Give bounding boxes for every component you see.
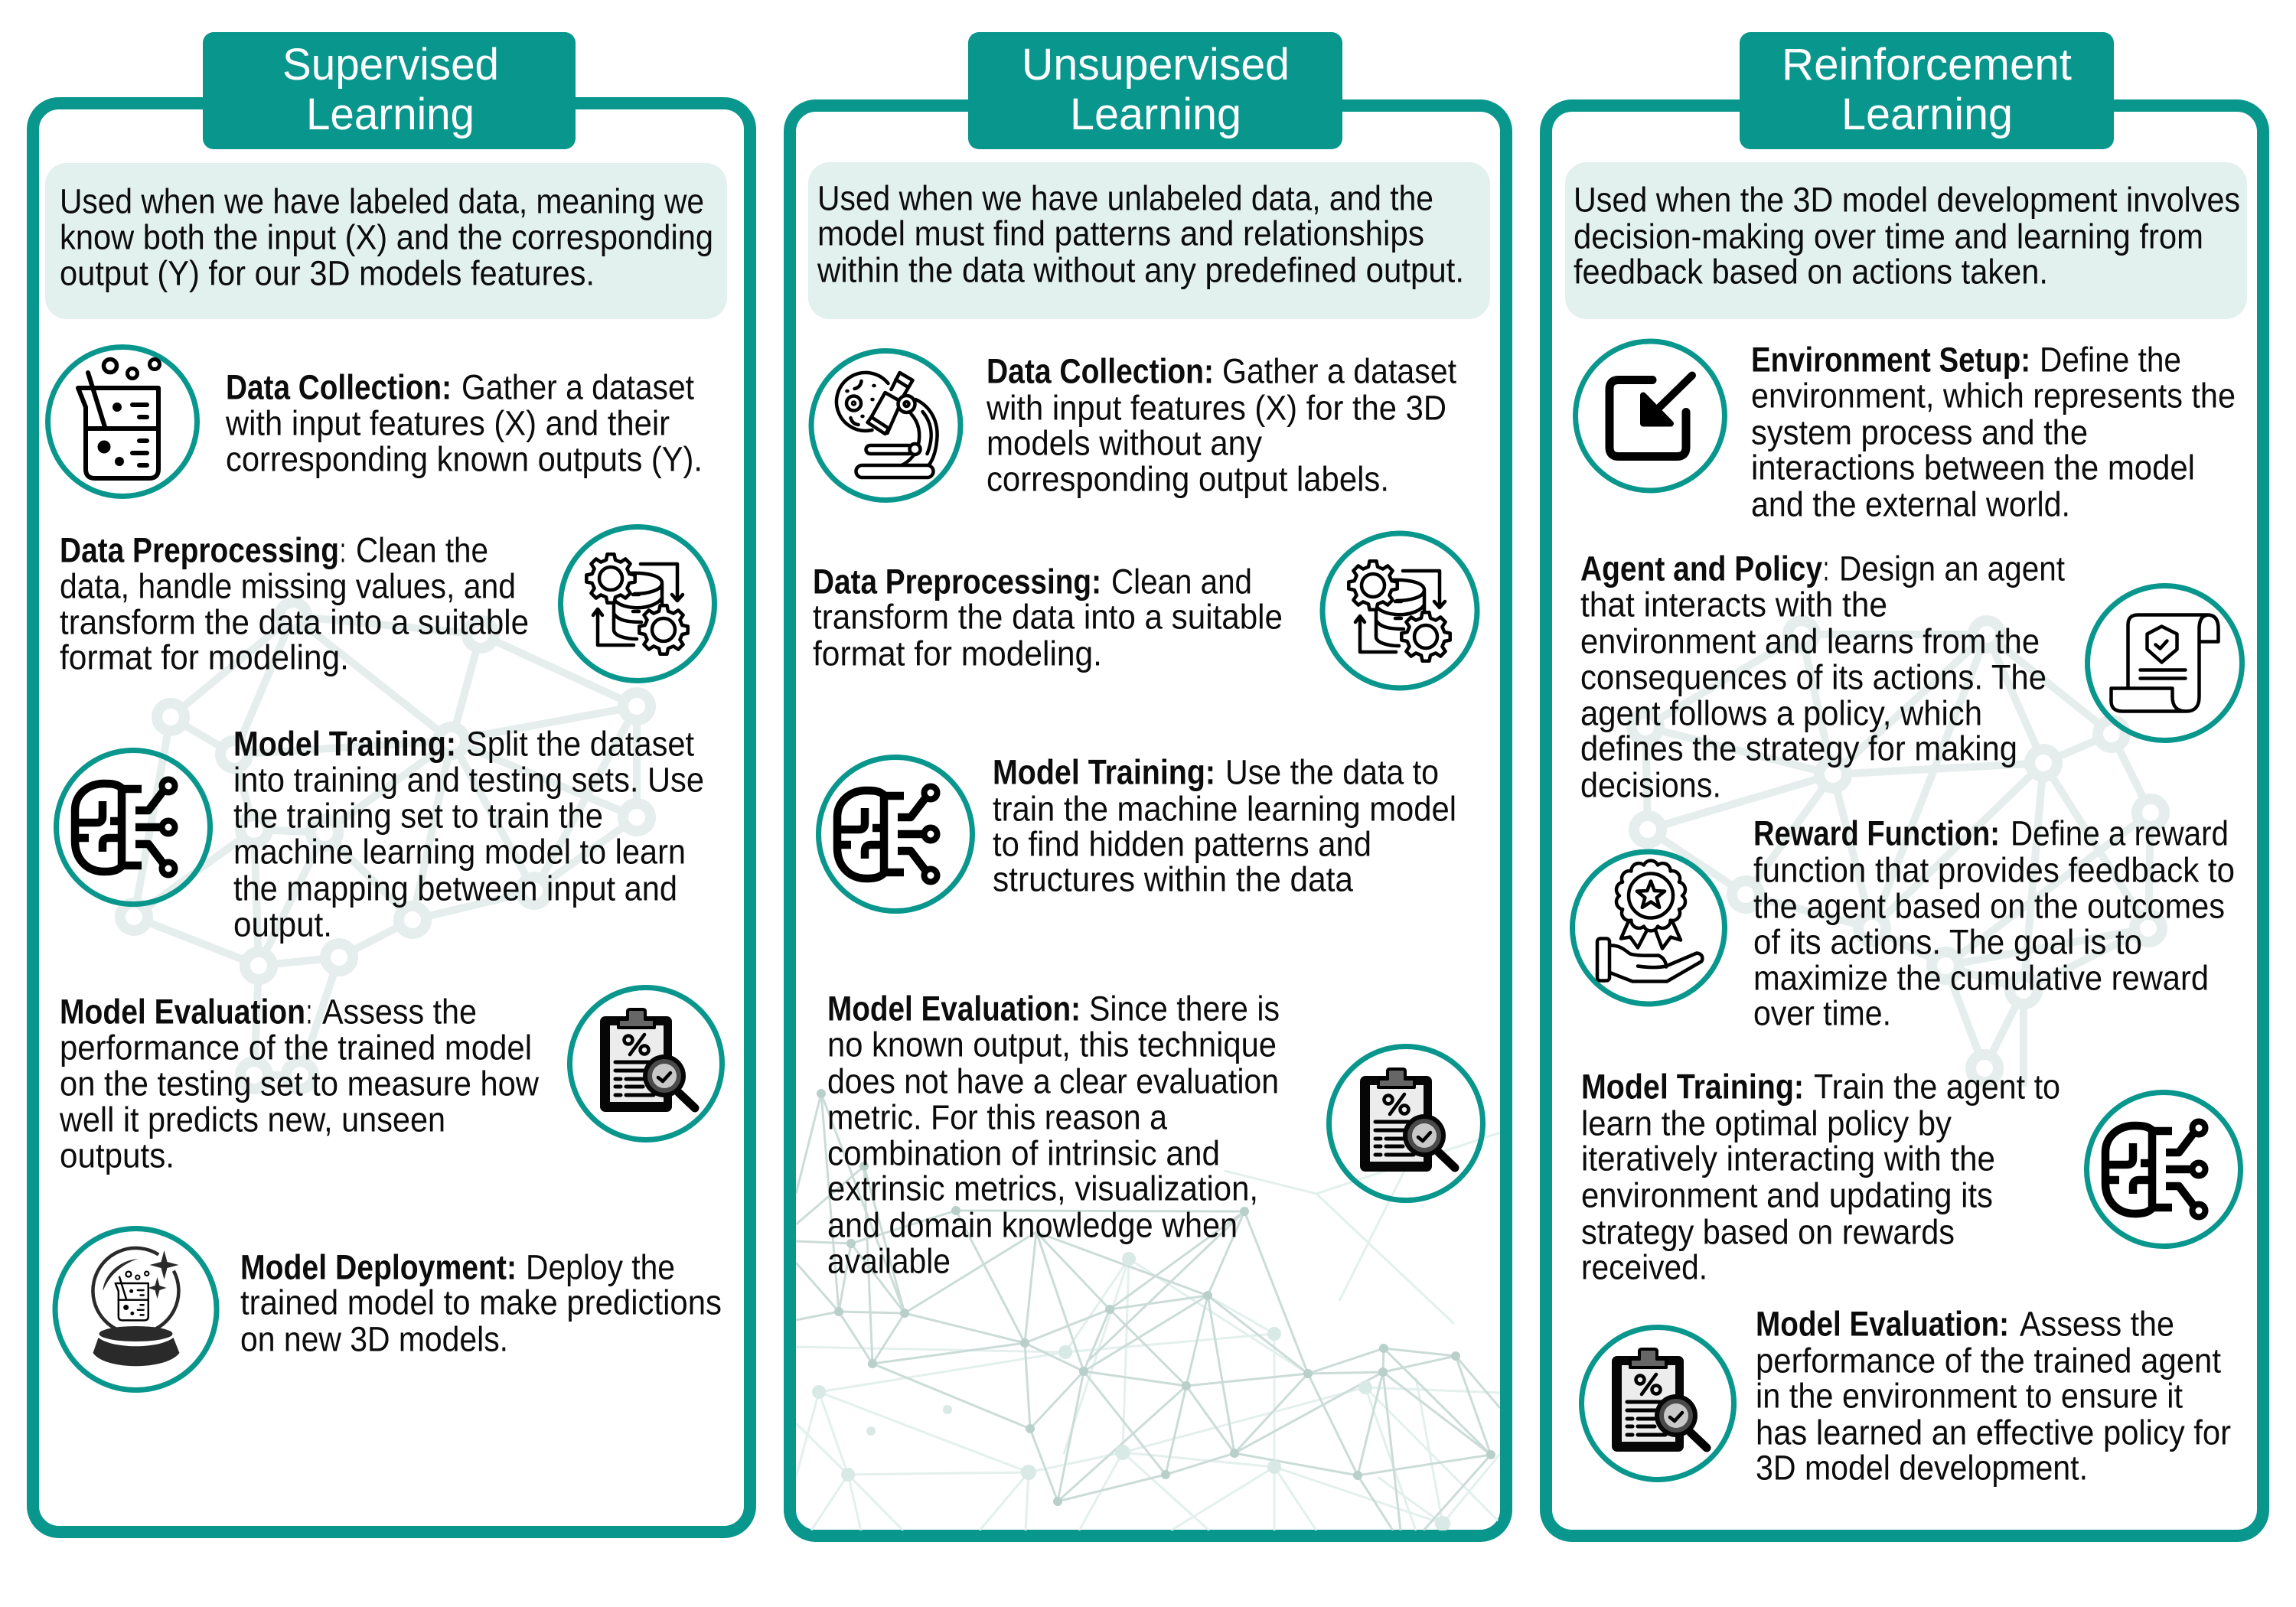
text: model evaluation [1756,1304,2231,1488]
text: model training: Train the agent to [1814,1067,2060,1107]
text: data preprocessing: format for modeling. [813,634,1102,673]
text: model evaluation: no known output, this technique [827,1025,1277,1064]
intro box: model must find patterns and relationships [817,214,1424,253]
text: data collection: Data Collection: [226,367,452,407]
text: model evaluation: outputs. [60,1136,174,1175]
text: model evaluation: on the testing set to measure how [60,1064,539,1103]
text: data collection: models without any [987,424,1262,462]
intro box [808,162,1490,319]
text: model deployment [240,1247,722,1359]
heading: Reinforcement Learning: Learning [1841,90,2013,139]
text: environment setup: system process and the [1751,413,2088,451]
heading: Unsupervised Learning: Learning [1070,90,1241,139]
text: model training: Model Training: [233,724,456,764]
text: model training: iteratively interacting with the [1581,1139,1995,1178]
text: model training: environment and updating its [1581,1175,1993,1215]
icon: microscope [811,350,960,500]
text: data preprocessing: : [340,531,346,569]
text: data collection [225,367,703,479]
text: model evaluation: Model Evaluation: [827,989,1081,1028]
icon: brain [2086,1093,2241,1246]
intro box [1565,162,2247,319]
text: model deployment: trained model to make predictions [240,1283,722,1322]
text: data collection: Gather a dataset [1222,352,1456,390]
heading: Unsupervised Learning: Unsupervised [1022,40,1290,90]
text: agent and policy [1580,549,2065,805]
background network [796,1089,1500,1531]
text: data preprocessing [60,531,529,676]
text: model evaluation: performance of the trained model [60,1028,532,1067]
text: agent and policy: Design an agent [1839,549,2065,588]
text: agent and policy: : [1823,549,1829,588]
text: model evaluation: performance of the trained agent [1756,1341,2221,1380]
panel: supervised learning [33,32,750,1532]
text: data preprocessing [813,562,1283,673]
text: model evaluation: Model Evaluation [60,992,305,1032]
intro box: Used when we have unlabeled data, and the [817,179,1433,217]
text: model evaluation: in the environment to ensure it [1756,1376,2183,1416]
text: model training: machine learning model to learn [233,833,686,871]
intro box: Used when we have labeled data, meaning we [60,182,704,220]
text: model evaluation [59,992,539,1175]
icon: reward hand and badge [1572,852,1725,1004]
icon: gears and database [560,526,715,681]
text: data collection: with input features (X) and their [225,404,670,442]
text: model deployment: Deploy the [526,1247,675,1287]
icon: brain [57,750,210,905]
text: reward function: of its actions. The goal is to [1753,923,2142,961]
text: model deployment: Model Deployment: [240,1247,517,1287]
text: model training: to find hidden patterns and [993,825,1371,863]
text: model training: Model Training: [1581,1067,1804,1107]
text: agent and policy: agent follows a policy, which [1580,693,1982,733]
text: environment setup: environment, which represents the [1751,376,2236,415]
panel: reinforcement learning [1546,32,2263,1536]
text: model training: strategy based on rewards [1581,1212,1955,1252]
text: environment setup: interactions between the model [1751,448,2195,487]
text: environment setup: and the external world. [1751,485,2070,523]
text: model training: the mapping between input and [233,869,677,908]
text: model evaluation: Model Evaluation: [1756,1304,2009,1344]
intro box: know both the input (X) and the corresponding [60,217,713,257]
text: model training [993,753,1456,898]
text: agent and policy: decisions. [1580,765,1721,805]
text: agent and policy: environment and learns from the [1580,621,2040,661]
text: data collection: with input features (X) for the 3D [986,389,1446,427]
text: reward function: Define a reward [2011,814,2229,852]
text: model training: Split the dataset [466,724,694,764]
background network [1632,621,2164,1087]
text: model evaluation: does not have a clear evaluation [827,1062,1279,1100]
text: model training: Model Training: [993,753,1215,791]
text: agent and policy: that interacts with the [1580,585,1887,624]
text: model evaluation: 3D model development. [1756,1448,2088,1488]
text: model evaluation: Since there is [1089,989,1280,1028]
heading: Unsupervised Learning [968,32,1342,149]
text: environment setup [1751,340,2236,523]
text: model evaluation: available [827,1241,951,1281]
text: model training: Use the data to [1225,753,1439,791]
intro box: decision-making over time and learning from [1574,217,2203,256]
text: data preprocessing: Data Preprocessing [60,531,339,569]
text: data preprocessing: Clean and [1111,562,1252,601]
icon: clipboard with magnifier [1329,1047,1483,1200]
text: data collection: Gather a dataset [461,367,694,407]
text: model training: received. [1581,1247,1707,1287]
heading: Supervised Learning: Supervised [282,40,499,90]
intro box: feedback based on actions taken. [1574,253,2048,291]
text: agent and policy: Agent and Policy [1580,549,1822,588]
text: model training [1581,1067,2060,1287]
text: model evaluation: metric. For this reason a [827,1097,1168,1137]
text: model training: the training set to train the [233,796,603,836]
text: data preprocessing: data, handle missing values, and [60,566,516,606]
icon: clipboard with magnifier [1581,1327,1734,1480]
text: reward function: function that provides feedback to [1753,851,2235,889]
text: model deployment: on new 3D models. [240,1319,508,1359]
text: reward function: Reward Function: [1753,814,2000,852]
heading: Supervised Learning [203,32,576,149]
text: reward function: maximize the cumulative reward [1753,958,2209,998]
text: model evaluation: Assess the [2020,1304,2174,1344]
icon: policy scroll [2088,586,2242,741]
text: environment setup: Environment Setup: [1751,340,2030,380]
text: data collection: Data Collection: [987,352,1214,390]
icon: clipboard with magnifier [569,987,722,1140]
text: data preprocessing: format for modeling. [60,638,349,676]
panel: unsupervised learning [790,32,1506,1536]
text: model evaluation: and domain knowledge when [827,1206,1238,1244]
intro box: output (Y) for our 3D models features. [60,254,595,292]
heading: Supervised Learning: Learning [306,90,475,139]
icon: crystal ball [55,1229,217,1390]
text: model training: into training and testing sets. Use [233,761,704,799]
text: reward function [1753,814,2235,1033]
background network [120,602,651,1089]
text: data preprocessing: transform the data into a suitable [60,603,529,641]
text: model evaluation: combination of intrinsic and [827,1134,1220,1172]
intro box: Used when the 3D model development involves [1574,181,2240,219]
text: model evaluation: : [306,992,312,1032]
icon: beaker [47,347,197,496]
text: model evaluation: well it predicts new, unseen [59,1100,445,1139]
text: environment setup: Define the [2040,340,2181,380]
text: data collection [986,352,1456,499]
text: reward function: over time. [1753,993,1891,1033]
icon: environment arrow [1575,341,1725,491]
text: model training: structures within the data [993,860,1354,898]
intro box [45,163,727,319]
text: data preprocessing: transform the data into a suitable [813,597,1283,637]
text: model evaluation: has learned an effective policy for [1756,1413,2231,1452]
intro box: within the data without any predefined output. [817,251,1464,289]
text: agent and policy: defines the strategy for making [1580,729,2017,768]
text: model training: learn the optimal policy by [1581,1103,1952,1143]
heading: Reinforcement Learning: Reinforcement [1782,40,2072,90]
text: data collection: corresponding known outputs (Y). [226,439,703,479]
heading: Reinforcement Learning [1740,32,2114,149]
text: model evaluation [827,989,1280,1281]
text: model training [233,724,704,944]
icon: brain [819,758,972,911]
icon: gears and database [1322,533,1477,688]
text: reward function: the agent based on the outcomes [1753,886,2225,926]
text: data collection: corresponding output labels. [987,459,1389,499]
text: agent and policy: consequences of its actions. The [1580,658,2047,696]
text: model evaluation: Assess the [322,992,477,1032]
text: model evaluation: extrinsic metrics, visualization, [827,1169,1258,1208]
text: model training: train the machine learning model [993,790,1456,828]
text: model training: output. [233,905,332,944]
text: data preprocessing: Clean the [356,531,488,569]
text: data preprocessing: Data Preprocessing: [813,562,1101,601]
